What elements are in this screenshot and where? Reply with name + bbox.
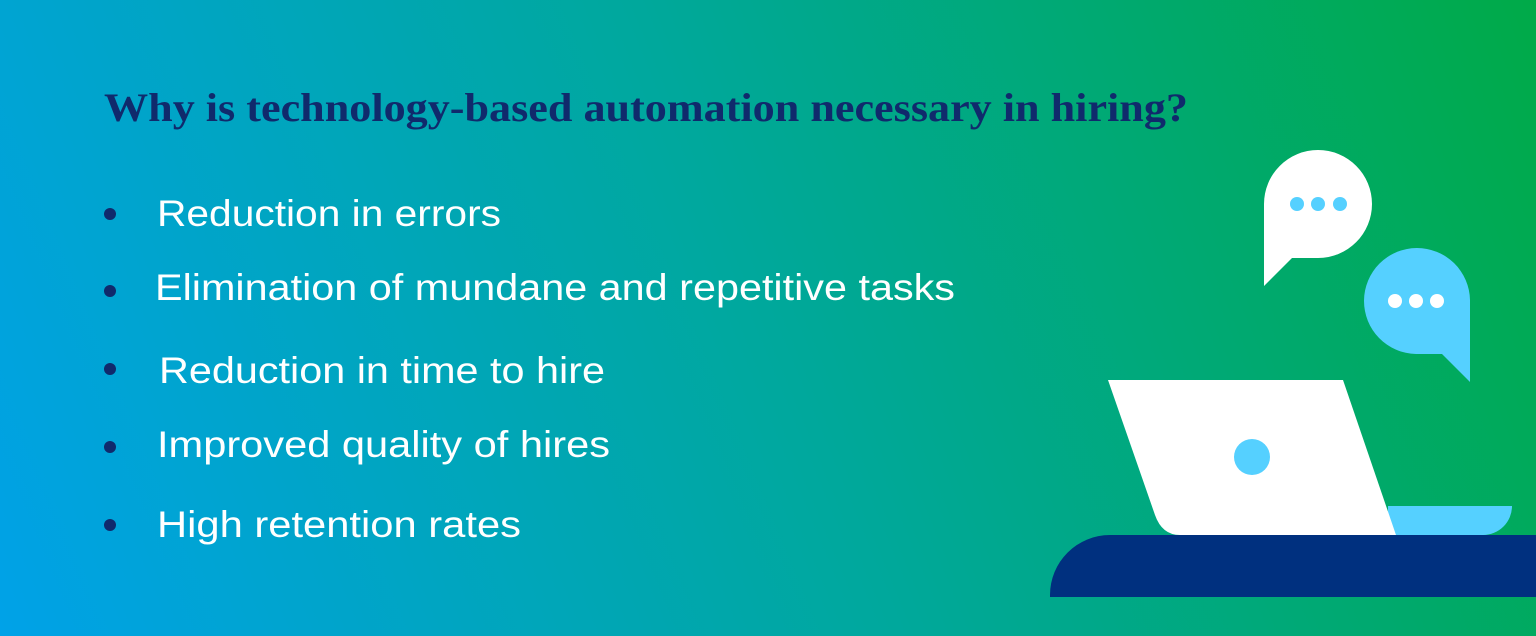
- bullet 3: Reduction in time to hire: [159, 350, 605, 391]
- bullet 1: Reduction in errors: [157, 193, 501, 234]
- title: Why is technology-based automation necessary in hiring?: [104, 85, 1188, 130]
- illustration: laptop with chat bubbles: [1050, 150, 1536, 597]
- icon: blue chat bubble: [1364, 248, 1470, 382]
- laptop keyboard base: [1388, 506, 1512, 535]
- bullet 5: High retention rates: [157, 504, 521, 545]
- bullet list: [104, 193, 955, 545]
- desk: [1050, 535, 1536, 597]
- laptop screen: [1108, 380, 1396, 535]
- icon: white chat bubble: [1264, 150, 1372, 286]
- bullet 4: Improved quality of hires: [157, 424, 610, 465]
- bullet 2: Elimination of mundane and repetitive tasks: [155, 267, 955, 308]
